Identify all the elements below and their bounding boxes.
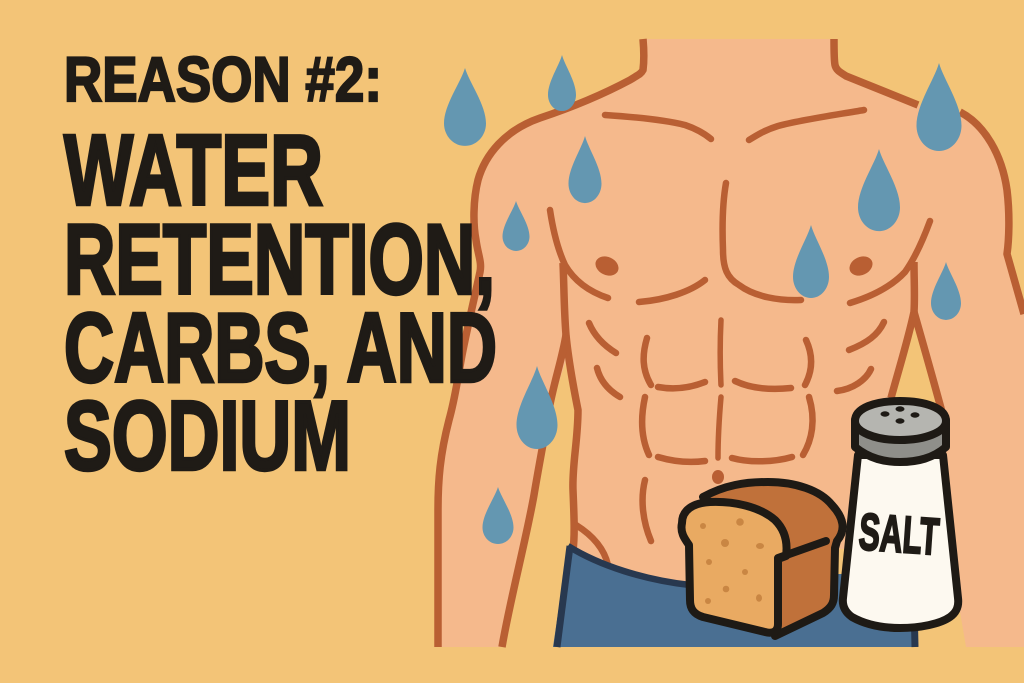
title line 2: RETENTION, (64, 204, 495, 314)
illustration: male torso (438, 39, 1024, 647)
shaker lid side (855, 420, 946, 462)
bread slice face (681, 502, 787, 633)
shaker body (843, 455, 958, 628)
shorts (553, 546, 918, 647)
title line 3: CARBS, AND (64, 292, 497, 402)
body outline (438, 39, 1024, 647)
drop 2 (548, 55, 576, 111)
drop 9 (516, 366, 558, 449)
title: water retention, carbs, and sodium (64, 114, 497, 490)
shaker holes (880, 406, 920, 424)
bread pores (700, 518, 764, 604)
shaker lid top (855, 401, 946, 440)
torso skin silhouette (438, 39, 1024, 647)
salt label: SALT (857, 503, 941, 567)
nipples and navel (592, 253, 876, 484)
bread crust (703, 482, 843, 636)
chest and abdominal muscle lines (550, 110, 930, 565)
drop 6 (858, 149, 900, 231)
drop 4 (502, 201, 530, 251)
title line 1: WATER (64, 114, 323, 226)
icon: bread loaf (681, 482, 843, 636)
drop 10 (482, 487, 514, 544)
heading: reason number: REASON #2: (64, 45, 382, 115)
water drops (444, 55, 962, 544)
drop 7 (793, 225, 829, 298)
gap between right arm and torso (870, 323, 966, 647)
drop 1 (444, 68, 486, 146)
drop 5 (916, 63, 962, 151)
icon: salt shaker (843, 401, 958, 628)
gap between left arm and torso (503, 358, 577, 647)
drop 8 (931, 262, 961, 320)
drop 3 (568, 136, 602, 203)
title line 4: SODIUM (64, 380, 351, 490)
